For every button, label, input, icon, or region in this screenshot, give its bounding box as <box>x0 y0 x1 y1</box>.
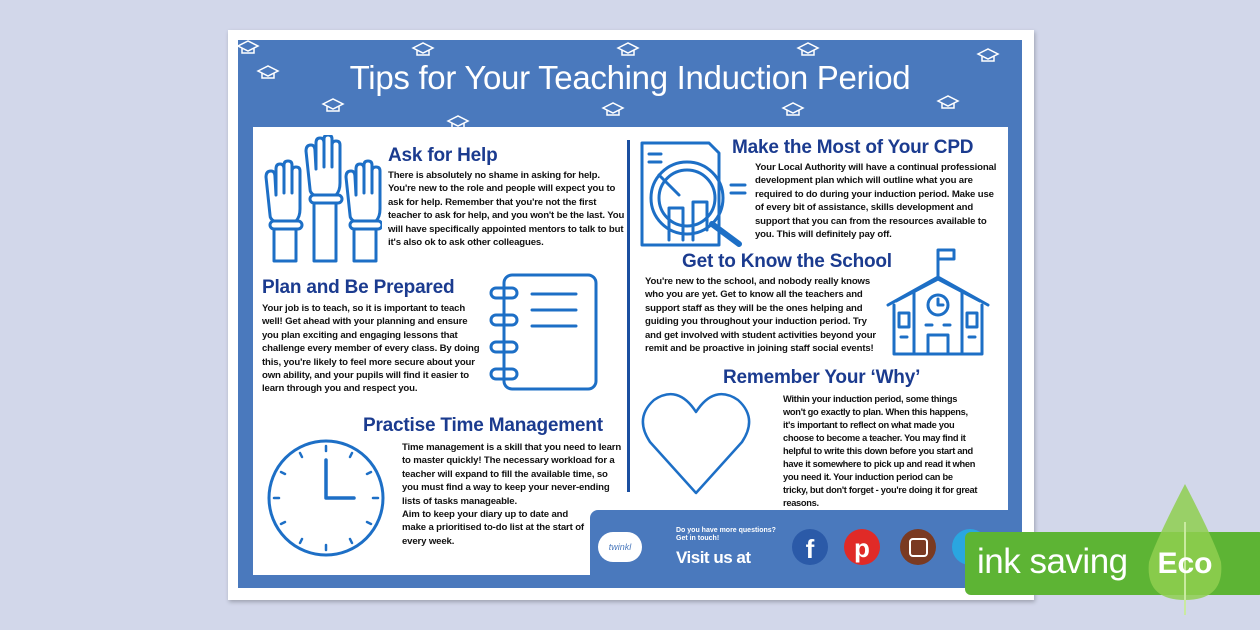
text: why: Within your induction period, some things won't go exactly to plan. When this happens, it's important to reflect on what made you choose to become a teacher. You may find it helpful to write this down before you start and have it somewhere to pick up and read it when you need it. Your induction period can be tricky, but don't forget - you're doing it for great reasons. <box>783 394 977 508</box>
heading: school: Get to Know the School <box>682 251 892 272</box>
footer <box>590 510 1022 588</box>
heading: cpd: Make the Most of Your CPD <box>732 137 973 158</box>
footer: Visit us at <box>676 548 750 567</box>
icon: notebook <box>490 274 598 390</box>
icon: heart <box>642 392 750 494</box>
text: ask for help: There is absolutely no shame in asking for help. You're new to the role and people will expect you to ask for help. Remember that you're not the first teacher to ask for help, and you won't be the last. You will have specifically appointed mentors to talk to but it's also ok to ask other colleagues. <box>388 170 624 248</box>
text: cpd: Your Local Authority will have a continual professional development plan which will outline what you are required to do during your induction period. Make use of every bit of assistance, skills development and support that you can from the resources available to you. This will definitely pay off. <box>755 162 996 240</box>
blue frame <box>238 40 1022 588</box>
social icons <box>792 529 828 565</box>
heading: plan: Plan and Be Prepared <box>262 277 454 298</box>
eco badge <box>965 532 1260 595</box>
icon: twinkl logo <box>598 532 642 562</box>
text: school: You're new to the school, and nobody really knows who you are yet. Get to know all the teachers and support staff as they will be the ones helping and guiding you throughout your induction period. Try and get involved with student activities beyond your remit and be proactive in joining staff social events! <box>645 276 876 354</box>
title: Tips for Your Teaching Induction Period <box>350 59 910 96</box>
icon: cpd chart <box>640 142 746 247</box>
footer: p <box>854 533 870 563</box>
paper <box>228 30 1034 600</box>
heading: why: Remember Your ‘Why’ <box>723 367 920 388</box>
icon: leaf <box>1148 484 1222 615</box>
text: time: Time management is a skill that you need to learn to master quickly! The necessary workload for a teacher will expand to fill the available time, so you must find a way to keep your never-ending lists of tasks manageable. <box>402 442 621 507</box>
footer text <box>676 526 776 542</box>
content panel <box>253 127 1008 575</box>
text: time <box>402 442 621 547</box>
footer text: Do you have more questions? <box>676 527 776 534</box>
heading: ask for help: Ask for Help <box>388 145 498 166</box>
icon: school building <box>886 248 990 356</box>
icon: clock <box>268 440 384 556</box>
text: plan: Your job is to teach, so it is important to teach well! Get ahead with your planning and ensure you plan exciting and engaging lessons that challenge every member of every class. By doing this, you're likely to feel more secure about your own ability, and your pupils will find it easier to learn through you and respect you. <box>262 303 479 394</box>
divider <box>627 140 630 492</box>
footer text: Get in touch! <box>676 535 719 542</box>
heading: time: Practise Time Management <box>363 415 603 436</box>
text: time: Aim to keep your diary up to date and make a prioritised to-do list at the start of every week. <box>402 509 584 547</box>
icon: raised hands <box>264 135 382 262</box>
social icons: f <box>806 534 814 564</box>
icon: twinkl logo: twinkl <box>609 542 631 552</box>
icon: leaf: Eco <box>1157 547 1213 580</box>
eco badge: ink saving <box>977 542 1128 581</box>
